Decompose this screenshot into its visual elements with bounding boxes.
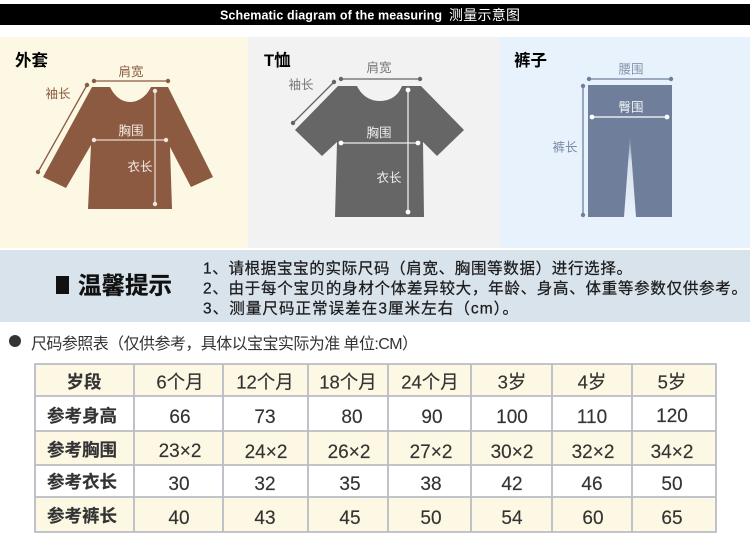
trouser length row: 60: [582, 508, 604, 529]
top length row: [47, 472, 683, 495]
title bar: 测量示意图: [449, 7, 520, 23]
chest measure: [92, 123, 168, 142]
height row: 80: [341, 407, 363, 428]
top length row: 50: [661, 474, 683, 495]
trouser length row: 43: [254, 508, 276, 529]
hip measure: [590, 100, 669, 119]
top length row: 32: [254, 474, 276, 495]
body length measure: 衣长: [127, 159, 153, 174]
heading: jacket: 外套: [15, 50, 48, 70]
height row: 90: [421, 407, 443, 428]
chest row: [47, 440, 693, 463]
top length row: 38: [420, 474, 442, 495]
trouser length measure: [552, 84, 585, 217]
size chart table: [35, 364, 716, 532]
sleeve length measure: 袖长: [45, 86, 71, 101]
chest row: 23×2: [159, 441, 201, 462]
top length row: 42: [501, 474, 523, 495]
waist measure: 腰围: [618, 62, 644, 76]
top length row: 46: [581, 474, 603, 495]
trouser length measure: 裤长: [552, 140, 578, 154]
top length row: 35: [339, 474, 361, 495]
header row: 3岁: [498, 372, 526, 392]
body length measure: [127, 89, 157, 206]
heading: t-shirt: T恤: [264, 51, 291, 70]
height row: 参考身高: [47, 406, 117, 426]
height row: 120: [656, 406, 688, 427]
trouser length row: 参考裤长: [47, 506, 117, 526]
chest row: 参考胸围: [47, 440, 117, 460]
shoulder width measure: [339, 60, 422, 81]
trouser length row: [47, 506, 683, 529]
header row: [66, 372, 686, 392]
size chart caption: 尺码参照表（仅供参考，具体以宝宝实际为准 单位:CM）: [31, 335, 418, 353]
hip measure: 臀围: [618, 100, 644, 114]
t-shirt silhouette: [295, 86, 464, 217]
chest measure: 胸围: [118, 123, 144, 138]
sleeve length measure: 袖长: [288, 77, 314, 92]
chest row: 24×2: [245, 442, 287, 463]
trouser length row: 45: [339, 508, 361, 529]
chest measure: 胸围: [366, 125, 392, 140]
sleeve length measure: [288, 77, 336, 125]
shoulder width measure: [92, 64, 170, 83]
trouser length row: 50: [420, 508, 442, 529]
chest row: 30×2: [491, 442, 533, 463]
tip line 3: 3、测量尺码正常误差在3厘米左右（cm）。: [203, 300, 518, 318]
tips band: [0, 250, 750, 322]
top length row: 参考衣长: [47, 472, 117, 492]
chest row: 27×2: [410, 442, 452, 463]
body length measure: 衣长: [376, 170, 402, 185]
height row: 73: [254, 407, 276, 428]
shoulder width measure: 肩宽: [118, 64, 144, 79]
tips heading: 温馨提示: [78, 272, 172, 298]
tip line 1: 1、请根据宝宝的实际尺码（肩宽、胸围等数据）进行选择。: [203, 260, 632, 278]
top length row: 30: [168, 474, 190, 495]
sleeve length measure: [36, 83, 89, 174]
panel: trousers: [500, 37, 750, 248]
height row: 66: [169, 407, 191, 428]
trouser length row: 54: [501, 508, 523, 529]
chest row: 32×2: [572, 442, 614, 463]
panel: jacket: [0, 37, 248, 248]
header row: 12个月: [236, 372, 294, 392]
tip line 2: 2、由于每个宝贝的身材个体差异较大，年龄、身高、体重等参数仅供参考。: [203, 280, 747, 298]
height row: [47, 406, 688, 428]
header row: 24个月: [401, 372, 459, 392]
shoulder width measure: 肩宽: [366, 60, 392, 75]
chest row: 34×2: [651, 442, 693, 463]
trousers silhouette: [588, 85, 672, 217]
header row: 6个月: [156, 372, 204, 392]
header row: 岁段: [66, 372, 102, 392]
panel: t-shirt: [248, 37, 500, 248]
heading: trousers: 裤子: [514, 51, 547, 70]
height row: 110: [577, 407, 607, 428]
body length measure: [376, 88, 410, 214]
trouser length row: 40: [168, 508, 190, 529]
header row: 5岁: [658, 372, 686, 392]
jacket silhouette: [43, 87, 213, 209]
header row: 18个月: [319, 372, 377, 392]
chest row: 26×2: [328, 442, 370, 463]
header row: 4岁: [578, 372, 606, 392]
chest measure: [339, 125, 420, 145]
trouser length row: 65: [661, 508, 683, 529]
waist measure: [587, 62, 673, 81]
height row: 100: [496, 407, 528, 428]
title bar: [0, 4, 750, 25]
title bar: Schematic diagram of the measuring: [220, 8, 442, 22]
